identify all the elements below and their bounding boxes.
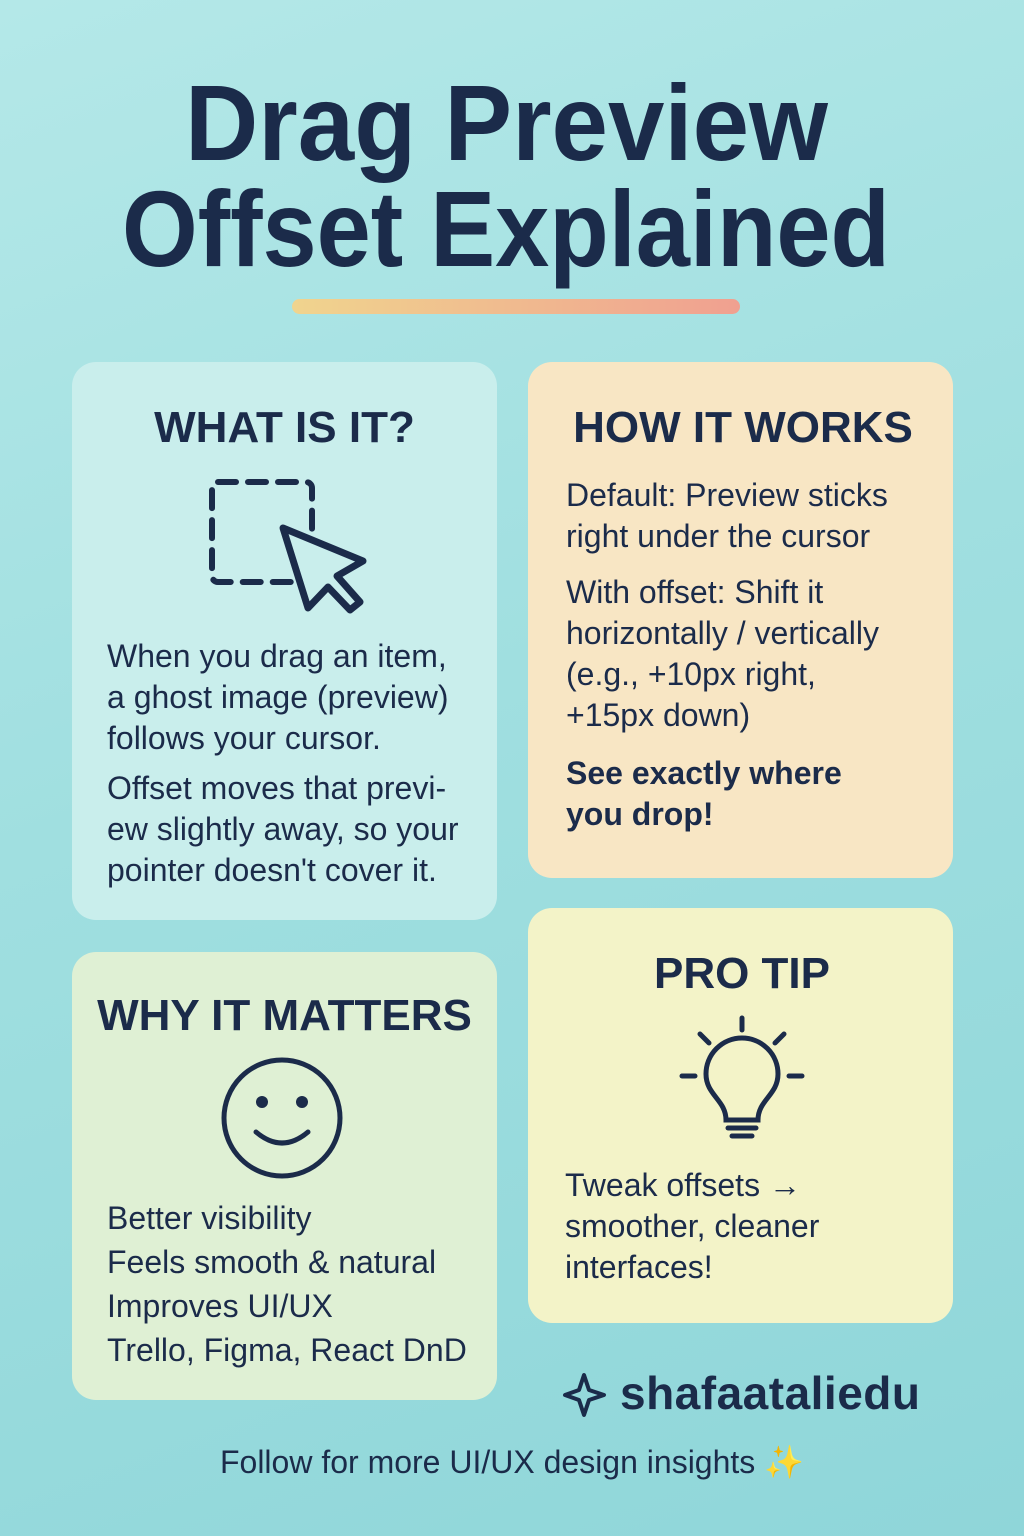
text: with offset: With offset: Shift it — [566, 574, 823, 610]
brand name: shafaataliedu — [620, 1367, 920, 1419]
title: Drag Preview — [185, 62, 829, 183]
text: default: right under the cursor — [566, 518, 870, 554]
text: tip: interfaces! — [565, 1249, 713, 1285]
text: offset: pointer doesn't cover it. — [107, 852, 437, 888]
text: tip — [565, 1167, 819, 1285]
text: tip: smoother, cleaner — [565, 1208, 819, 1244]
text: offset: ew slightly away, so your — [107, 811, 459, 847]
text: definition: a ghost image (preview) — [107, 679, 448, 715]
heading: pro tip: PRO TIP — [654, 949, 830, 998]
heading: why it matters: WHY IT MATTERS — [97, 991, 472, 1040]
text: default: Default: Preview sticks — [566, 477, 888, 513]
text: bold callout — [566, 755, 842, 832]
text: default — [566, 477, 888, 554]
text: tip: Tweak offsets → — [565, 1167, 801, 1203]
text: bold callout: See exactly where — [566, 755, 842, 791]
panel: how it works — [528, 362, 953, 878]
panel: pro tip — [528, 908, 953, 1323]
text: benefits list — [107, 1200, 467, 1368]
brand — [562, 1367, 920, 1419]
text: benefits list: Feels smooth & natural — [107, 1244, 436, 1280]
text: benefits list: Better visibility — [107, 1200, 312, 1236]
icon: sparkle — [562, 1373, 606, 1417]
text: benefits list: Improves UI/UX — [107, 1288, 333, 1324]
title: Offset Explained — [122, 168, 890, 289]
text: definition: When you drag an item, — [107, 638, 447, 674]
text: offset: Offset moves that previ- — [107, 770, 446, 806]
text: definition: follows your cursor. — [107, 720, 381, 756]
icon: smiley — [222, 1058, 342, 1178]
text: bold callout: you drop! — [566, 796, 714, 832]
heading: what is it: WHAT IS IT? — [154, 403, 415, 452]
text: with offset: +15px down) — [566, 697, 750, 733]
text: with offset: (e.g., +10px right, — [566, 656, 816, 692]
icon: dashed box with cursor — [209, 479, 366, 614]
panel: what is it — [72, 362, 497, 920]
text: benefits list: Trello, Figma, React DnD — [107, 1332, 467, 1368]
heading: how it works: HOW IT WORKS — [573, 403, 913, 452]
title — [122, 62, 890, 314]
footer: Follow for more UI/UX design insights ✨ — [220, 1444, 804, 1480]
text: with offset — [566, 574, 879, 733]
icon: lightbulb — [680, 1016, 804, 1138]
panel: why it matters — [72, 952, 497, 1400]
text: with offset: horizontally / vertically — [566, 615, 879, 651]
text: offset — [107, 770, 459, 888]
text: definition — [107, 638, 448, 756]
